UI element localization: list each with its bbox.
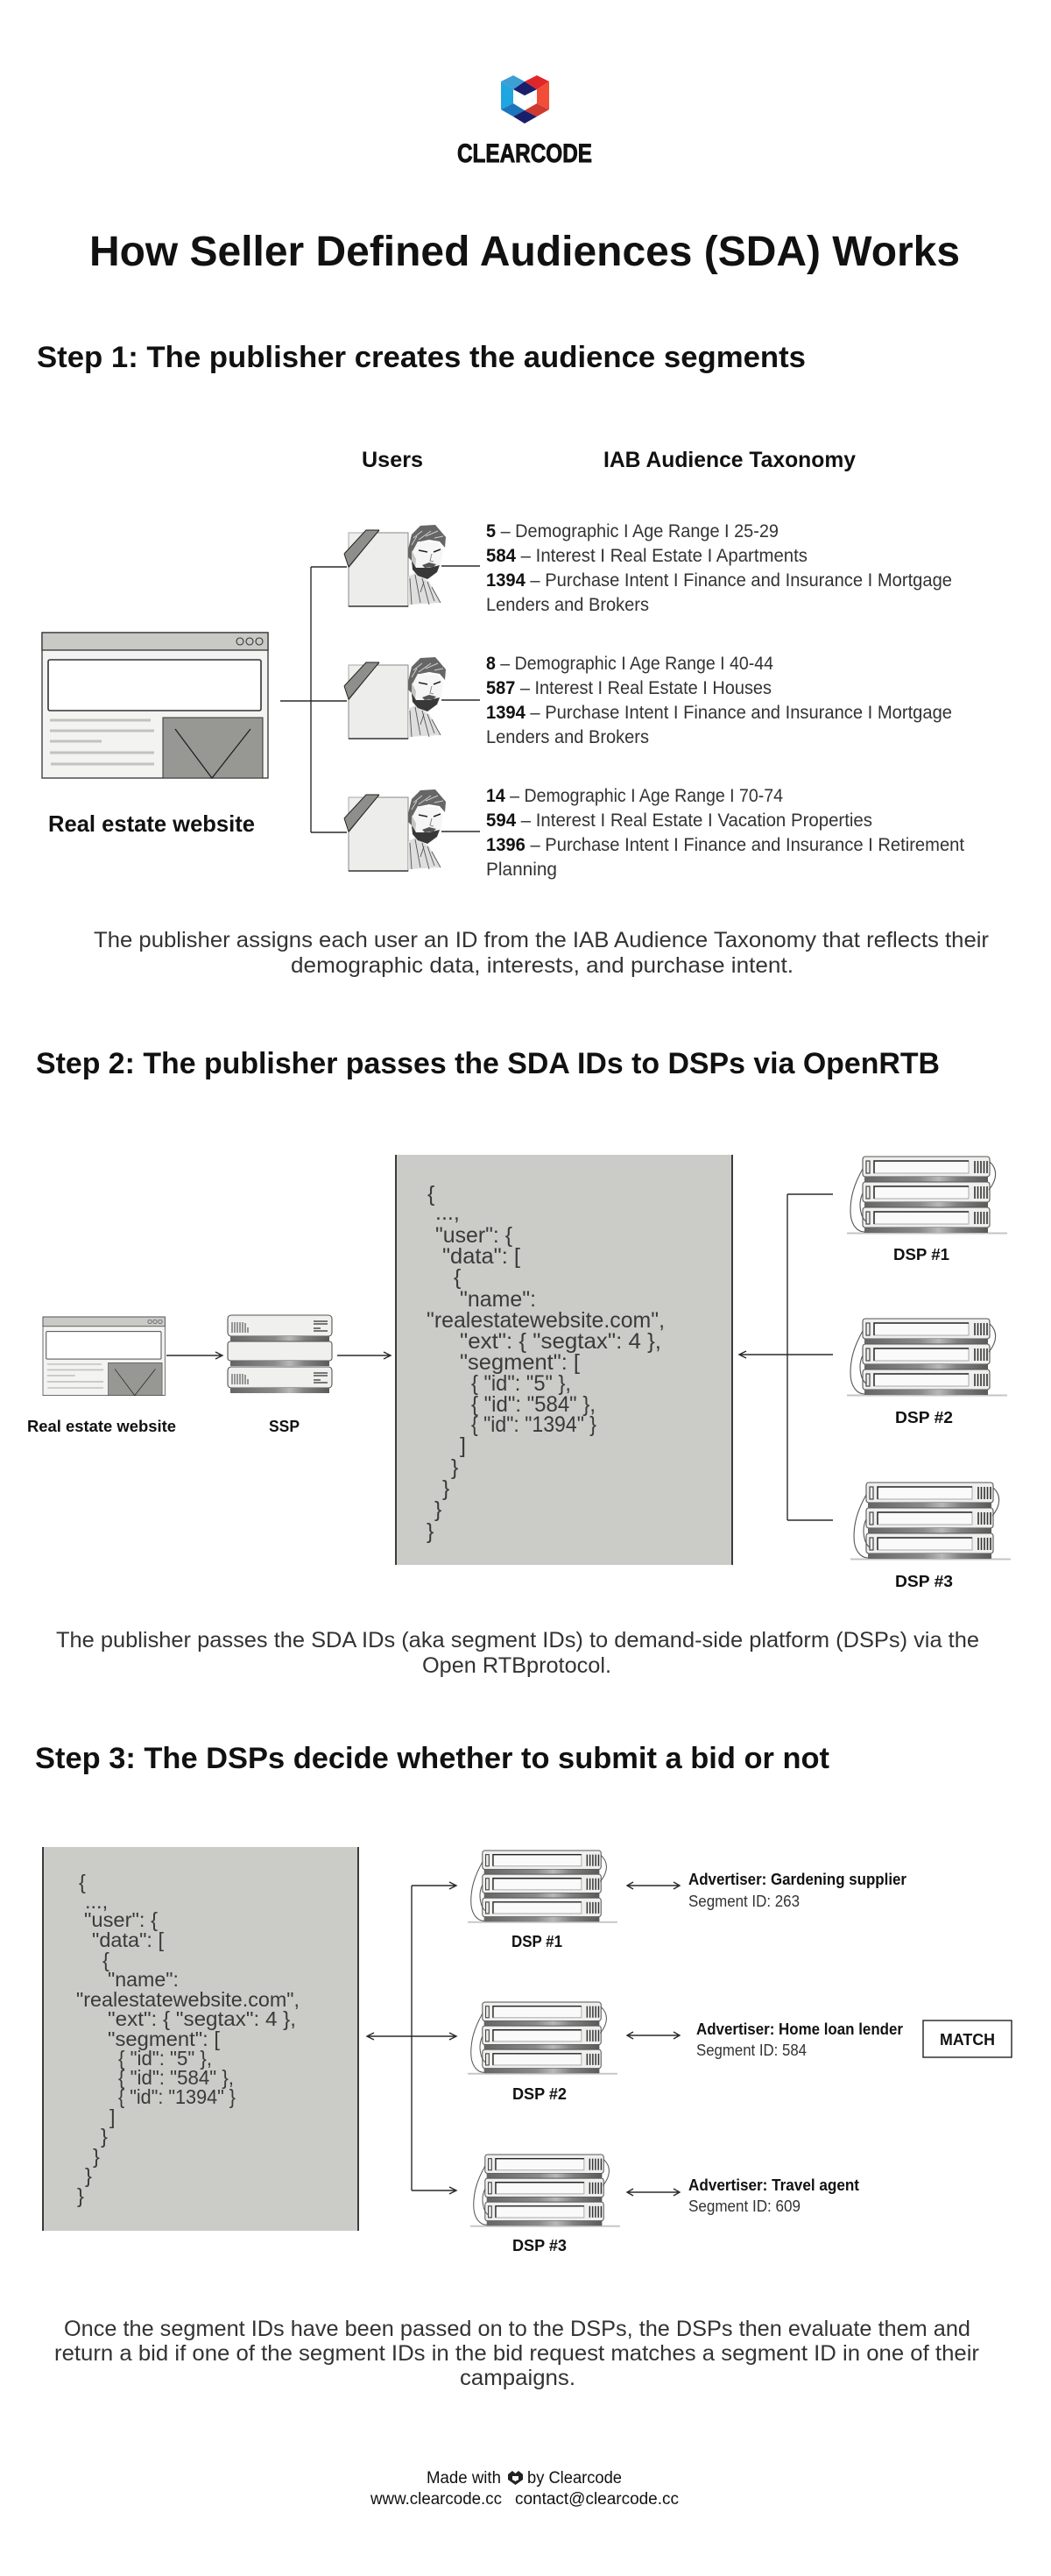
paragraph: step 2 description: Open RTBprotocol.: [422, 1653, 611, 1678]
icon: DSP 3 server: [850, 1483, 1011, 1560]
label: DSP 3: DSP #3: [895, 1573, 953, 1590]
label: DSP 2: DSP #2: [895, 1409, 953, 1426]
text block: user 1 segments: 1394 – Purchase Intent I Finance and Insurance I Mortgage: [486, 570, 952, 591]
arrows: bid request to DSPs: [367, 1882, 456, 2194]
panel: bid request JSON step 2: "segment": [: [460, 1350, 580, 1375]
panel: bid request JSON step 2: }: [434, 1497, 441, 1522]
panel: bid request JSON step 2: {: [454, 1265, 461, 1290]
text block: advertiser home loan lender: Segment ID: 584: [696, 2042, 807, 2059]
text block: user 1 segments: [486, 521, 952, 615]
icon: DSP 3 server: [470, 2155, 620, 2227]
panel: bid request JSON step 2: ]: [460, 1433, 466, 1458]
paragraph: step 3 description: [54, 2317, 979, 2390]
panel: bid request JSON step 3: "user": {: [84, 1908, 158, 1931]
arrow: SSP to bid request: [337, 1352, 391, 1359]
column heading: users: Users: [362, 448, 423, 472]
footer: by Clearcode: [527, 2469, 622, 2488]
panel: bid request JSON step 3: }: [85, 2164, 92, 2187]
paragraph: step 2 description: [56, 1628, 979, 1678]
icon: DSP 2 server: [847, 1319, 1007, 1397]
footer: contact@clearcode.cc: [515, 2490, 679, 2509]
arrow: DSPs to bid request: [739, 1194, 833, 1520]
icon: user 3: [344, 789, 446, 871]
panel: bid request JSON step 3: ]: [109, 2105, 116, 2128]
paragraph: step 2 description: The publisher passes the SDA IDs (aka segment IDs) to demand-side platform (DSPs) via the: [56, 1628, 979, 1652]
panel: bid request JSON step 2: [396, 1155, 732, 1565]
panel: bid request JSON step 2: { "id": "584" },: [471, 1392, 596, 1417]
paragraph: step 3 description: Once the segment IDs have been passed on to the DSPs, the DSPs then evaluate them and: [64, 2317, 970, 2341]
icon: SSP server: [228, 1315, 332, 1393]
panel: bid request JSON step 2: "realestatewebsite.com",: [427, 1308, 665, 1333]
logo: [457, 75, 592, 168]
footer: Made with: [427, 2469, 501, 2488]
text block: user 3 segments: 1396 – Purchase Intent I Finance and Insurance I Retirement: [486, 835, 964, 855]
label: real estate website small: Real estate website: [27, 1418, 176, 1435]
panel: bid request JSON step 2: { "id": "1394" }: [471, 1412, 596, 1437]
label: DSP 3: DSP #3: [512, 2237, 567, 2254]
text block: user 1 segments: 5 – Demographic I Age Range I 25-29: [486, 521, 779, 541]
panel: bid request JSON step 2: "ext": { "segtax": 4 },: [460, 1329, 661, 1354]
icon: DSP 1 server: [468, 1851, 617, 1923]
panel: bid request JSON step 3: {: [102, 1949, 109, 1971]
text block: user 3 segments: [486, 786, 964, 880]
label: DSP 2: DSP #2: [512, 2085, 567, 2103]
icon: user 2: [344, 657, 446, 739]
panel: bid request JSON step 2: { "id": "5" },: [471, 1371, 571, 1396]
panel: bid request JSON step 2: }: [427, 1519, 434, 1544]
icon: user 1: [344, 525, 446, 606]
arrow: DSP 1 to advertiser: [627, 1882, 680, 1889]
text block: user 2 segments: [486, 654, 952, 747]
text block: user 3 segments: Planning: [486, 860, 557, 880]
arrow: DSP 2 to advertiser: [627, 2032, 680, 2039]
callout: match: [923, 2020, 1012, 2057]
icon: DSP 1 server: [847, 1157, 1007, 1234]
label: DSP 1: DSP #1: [511, 1933, 562, 1950]
panel: bid request JSON step 3: }: [93, 2145, 100, 2168]
arrow: DSP 3 to advertiser: [627, 2189, 680, 2196]
text block: advertiser travel agent: [688, 2176, 859, 2215]
panel: bid request JSON step 3: "segment": [: [108, 2028, 220, 2050]
text block: advertiser gardening supplier: Advertiser: Gardening supplier: [688, 1871, 906, 1888]
text block: advertiser travel agent: Segment ID: 609: [688, 2197, 801, 2215]
connector lines users to segments: [441, 566, 480, 832]
text block: user 2 segments: 8 – Demographic I Age Range I 40-44: [486, 654, 773, 674]
panel: bid request JSON step 3: { "id": "584" },: [118, 2066, 234, 2089]
label: DSP 1: DSP #1: [893, 1246, 949, 1263]
panel: bid request JSON step 3: "data": [: [92, 1928, 164, 1951]
callout: match: MATCH: [940, 2031, 995, 2049]
panel: bid request JSON step 3: ...,: [85, 1890, 108, 1913]
paragraph: step 3 description: campaigns.: [460, 2366, 575, 2390]
text block: user 1 segments: 584 – Interest I Real Estate I Apartments: [486, 546, 808, 566]
text block: advertiser travel agent: Advertiser: Travel agent: [688, 2176, 859, 2194]
heading: step 1: Step 1: The publisher creates the audience segments: [37, 341, 806, 374]
column heading: IAB Audience Taxonomy: IAB Audience Taxonomy: [603, 448, 856, 472]
text block: user 1 segments: Lenders and Brokers: [486, 595, 649, 615]
panel: bid request JSON step 2: ...,: [435, 1200, 460, 1225]
panel: bid request JSON step 2: }: [451, 1455, 458, 1480]
text block: user 2 segments: 1394 – Purchase Intent I Finance and Insurance I Mortgage: [486, 703, 952, 723]
panel: bid request JSON step 2: {: [427, 1182, 434, 1207]
panel: bid request JSON step 3: {: [79, 1871, 86, 1893]
text block: advertiser gardening supplier: [688, 1871, 906, 1910]
panel: bid request JSON step 2: "name":: [460, 1287, 536, 1312]
panel: bid request JSON step 3: { "id": "1394" }: [118, 2085, 236, 2108]
panel: bid request JSON step 3: { "id": "5" },: [118, 2047, 212, 2070]
text block: user 3 segments: 14 – Demographic I Age Range I 70-74: [486, 786, 783, 806]
panel: bid request JSON step 3: }: [77, 2184, 84, 2207]
icon: real estate website small: [43, 1317, 165, 1396]
heading: step 3: Step 3: The DSPs decide whether to submit a bid or not: [35, 1742, 829, 1775]
tree connector website to users: [280, 567, 347, 832]
panel: bid request JSON step 2: "data": [: [442, 1244, 520, 1269]
icon: DSP 2 server: [468, 2002, 617, 2075]
panel: bid request JSON step 2: }: [442, 1476, 449, 1501]
paragraph: step 1 description: [94, 928, 989, 978]
text block: advertiser home loan lender: Advertiser: Home loan lender: [696, 2020, 903, 2038]
footer: www.clearcode.cc: [370, 2490, 502, 2509]
text block: advertiser gardening supplier: Segment ID: 263: [688, 1893, 800, 1910]
title: How Seller Defined Audiences (SDA) Works: [89, 229, 960, 275]
panel: bid request JSON step 3: "name":: [108, 1968, 179, 1991]
logo: CLEARCODE: [457, 139, 592, 168]
paragraph: step 1 description: The publisher assigns each user an ID from the IAB Audience Taxonomy that reflects their: [94, 928, 989, 952]
text block: advertiser home loan lender: [696, 2020, 903, 2059]
paragraph: step 3 description: return a bid if one of the segment IDs in the bid request matches a segment ID in one of their: [54, 2341, 979, 2366]
panel: bid request JSON step 3: "ext": { "segtax": 4 },: [108, 2007, 296, 2030]
footer: [370, 2469, 679, 2509]
panel: bid request JSON step 3: "realestatewebsite.com",: [76, 1988, 300, 2011]
arrow: website to SSP: [166, 1352, 222, 1359]
panel: bid request JSON step 3: }: [101, 2125, 108, 2148]
heading: step 2: Step 2: The publisher passes the SDA IDs to DSPs via OpenRTB: [36, 1047, 940, 1080]
icon: real estate website: [42, 633, 268, 778]
text block: user 2 segments: 587 – Interest I Real Estate I Houses: [486, 678, 772, 698]
panel: bid request JSON step 3: [43, 1847, 358, 2231]
text block: user 3 segments: 594 – Interest I Real Estate I Vacation Properties: [486, 810, 872, 831]
panel: bid request JSON step 2: "user": {: [435, 1223, 512, 1248]
text block: user 2 segments: Lenders and Brokers: [486, 727, 649, 747]
label: real estate website: Real estate website: [48, 810, 255, 837]
label: SSP: SSP: [269, 1418, 300, 1435]
paragraph: step 1 description: demographic data, interests, and purchase intent.: [291, 953, 794, 978]
